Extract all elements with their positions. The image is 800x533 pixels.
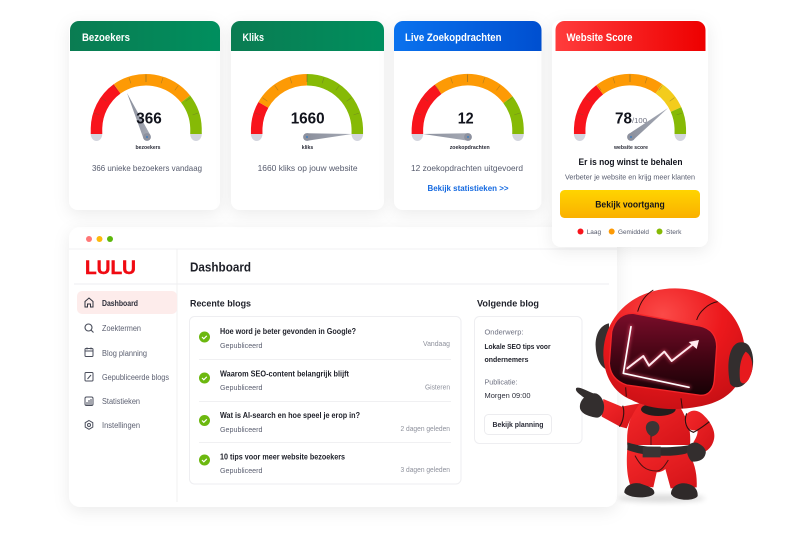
- nav: blog planning: Blog planning: [102, 349, 147, 358]
- screen: [609, 313, 717, 395]
- icon: search: [85, 324, 94, 332]
- blog item 3: 2 dagen geleden: [400, 424, 450, 433]
- gauge value: 366: [136, 110, 162, 128]
- gauge: [574, 74, 686, 151]
- panel: dashboard window: [69, 227, 617, 507]
- nav: zoektermen: Zoektermen: [102, 324, 141, 333]
- blog item 1: Vandaag: [423, 339, 450, 348]
- gauge: [251, 74, 363, 151]
- panel: next blog: [474, 316, 582, 444]
- gauge value: 78: [615, 110, 632, 128]
- link: bekijk statistieken: Bekijk statistieken >>: [428, 183, 509, 193]
- blog item 3: [199, 411, 450, 434]
- icon: published: [85, 372, 93, 381]
- blog item 4: [199, 452, 450, 475]
- nav: instellingen: Instellingen: [102, 421, 140, 430]
- blog item 1: [199, 327, 450, 350]
- belt: [627, 442, 690, 456]
- heading: recente blogs: Recente blogs: [190, 298, 251, 310]
- gauge label: kliks: [302, 145, 313, 151]
- other arm: [684, 411, 714, 452]
- blog item 2: Waarom SEO-content belangrijk blijft: [220, 370, 349, 378]
- gauge label: zoekopdrachten: [450, 145, 490, 151]
- blog item 4: 3 dagen geleden: [400, 465, 450, 474]
- panel: next blog: Lokale SEO tips voor: [484, 342, 551, 351]
- pointing hand: [576, 388, 604, 418]
- robot mascot: [576, 288, 753, 502]
- card title: Kliks: [242, 32, 264, 44]
- blog item 2: Gepubliceerd: [220, 383, 262, 392]
- card header: [556, 21, 706, 51]
- button: bekijk voortgang: Bekijk voortgang: [595, 200, 665, 210]
- gauge: [91, 74, 202, 151]
- card header: [70, 21, 220, 51]
- helmet seams: [626, 290, 718, 408]
- shoes: [624, 483, 698, 500]
- gauge value: 12: [458, 110, 474, 128]
- panel: website score: [552, 20, 708, 247]
- torso seam: [649, 435, 652, 445]
- legend: Laag: [587, 229, 601, 236]
- panel: bezoekers: [69, 21, 220, 210]
- icon: settings: [85, 420, 93, 429]
- torso: [627, 403, 690, 445]
- panel: next blog: ondernemers: [484, 355, 528, 364]
- legend: [578, 228, 682, 236]
- hip hand: [687, 443, 706, 462]
- blog item 1: Gepubliceerd: [220, 341, 262, 350]
- screen chart: [623, 327, 699, 387]
- blog item 2: Gisteren: [425, 382, 450, 392]
- sidebar navigation: [77, 291, 177, 430]
- helmet: [603, 288, 745, 409]
- ground shadow: [618, 494, 705, 502]
- panel: next blog: Morgen 09:00: [484, 391, 530, 400]
- needle: [303, 133, 352, 141]
- card description: 1660 kliks op jouw website: [258, 163, 358, 173]
- card description: 12 zoekopdrachten uitgevoerd: [411, 163, 523, 173]
- panel: live zoekopdrachten: [394, 21, 542, 210]
- panel: next blog: Onderwerp:: [484, 328, 524, 336]
- pointing arm: [602, 399, 640, 428]
- gauge: [412, 74, 524, 151]
- card header: [231, 21, 384, 51]
- pelvis seam: [635, 456, 668, 471]
- lower body: [627, 448, 697, 488]
- right earphone: [728, 342, 753, 387]
- card title: Website Score: [566, 32, 632, 44]
- panel: blog list: [190, 316, 461, 484]
- card title: Bezoekers: [82, 32, 130, 44]
- heading: volgende blog: Volgende blog: [477, 298, 539, 310]
- legend: Gemiddeld: [618, 229, 649, 236]
- panel: kliks: [231, 21, 384, 210]
- heading: dashboard: Dashboard: [190, 260, 251, 274]
- needle: [627, 108, 668, 141]
- button: bekijk voortgang: [560, 190, 700, 218]
- blog item 2: [199, 370, 450, 392]
- panel: next blog: Publicatie:: [484, 378, 518, 386]
- icon: statistics: [85, 397, 93, 406]
- nav: gepubliceerde blogs: Gepubliceerde blogs: [102, 373, 169, 382]
- chest button: [646, 421, 659, 437]
- blog item 3: Wat is AI-search en hoe speel je erop in?: [220, 411, 360, 420]
- icon: home: [85, 298, 93, 307]
- needle: [127, 93, 151, 141]
- icon: calendar: [85, 348, 93, 356]
- belt buckle: [643, 447, 661, 457]
- score description: Verbeter je website en krijg meer klanten: [565, 172, 695, 182]
- blog item 3: Gepubliceerd: [220, 425, 262, 434]
- left earphone: [596, 323, 609, 370]
- gauge label: website score: [613, 145, 648, 151]
- nav: dashboard: Dashboard: [102, 299, 138, 308]
- gauge maximum: /100: [632, 118, 647, 125]
- logo: LULU: [85, 258, 136, 279]
- score heading: Er is nog winst te behalen: [578, 157, 682, 167]
- card title: Live Zoekopdrachten: [405, 32, 502, 44]
- legend: Sterk: [666, 229, 682, 236]
- needle: [423, 133, 472, 141]
- gauge value: 1660: [291, 110, 325, 128]
- window controls: [86, 236, 113, 242]
- card description: 366 unieke bezoekers vandaag: [92, 163, 202, 173]
- nav active background: [77, 291, 177, 314]
- button: bekijk planning: Bekijk planning: [492, 420, 544, 429]
- blog item 4: 10 tips voor meer website bezoekers: [220, 452, 345, 462]
- gauge label: bezoekers: [136, 145, 160, 151]
- blog item 1: Hoe word je beter gevonden in Google?: [220, 327, 356, 336]
- card header: [394, 21, 542, 51]
- neck: [641, 403, 676, 416]
- blog item 4: Gepubliceerd: [220, 466, 262, 475]
- nav: statistieken: Statistieken: [102, 397, 140, 406]
